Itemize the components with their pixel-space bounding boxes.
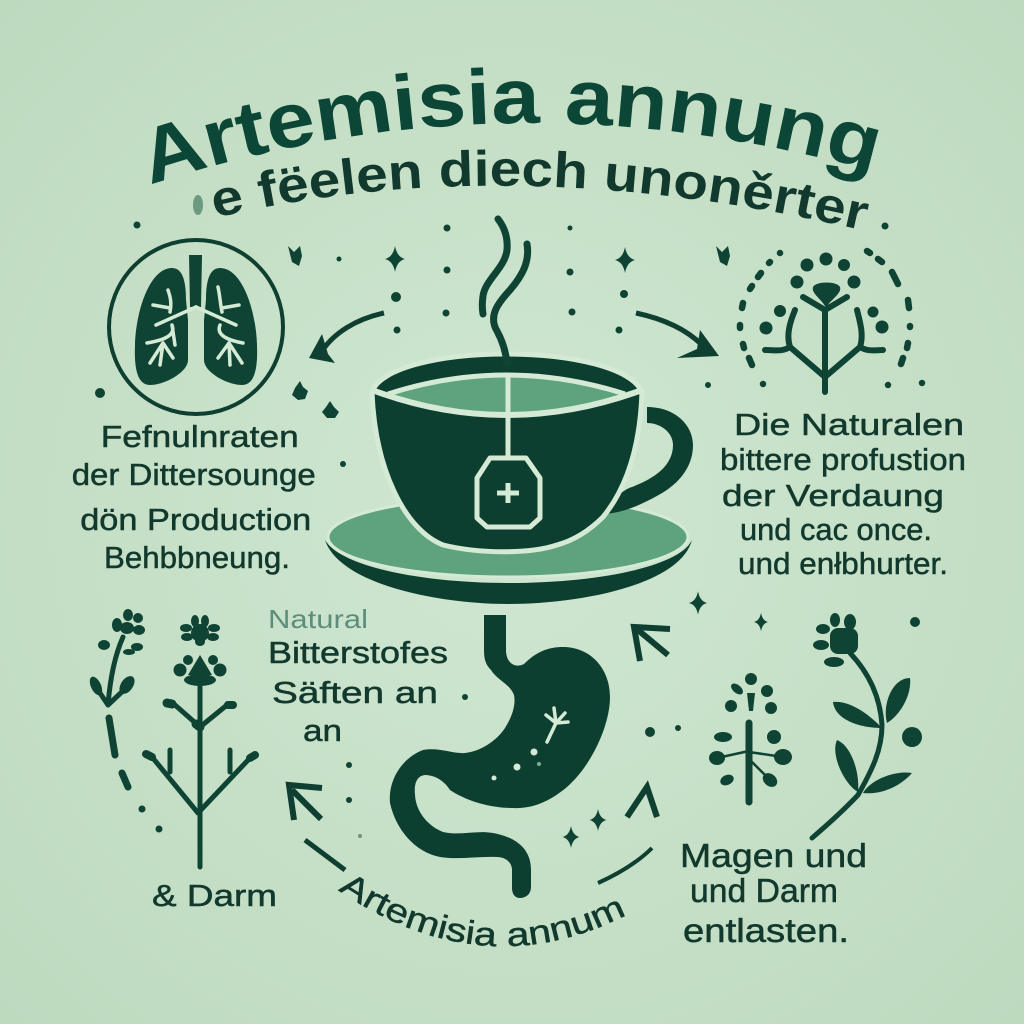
text block: centre left: Säften an: [272, 675, 438, 710]
text block: right top: bittere profustion: [720, 442, 966, 477]
text block: bottom right: und Darm: [690, 872, 838, 909]
tag: [477, 458, 540, 527]
text block: & Darm: & Darm: [152, 878, 277, 913]
text block: centre left: Natural: [268, 604, 368, 634]
icon: stomach: [390, 615, 610, 898]
text block: bottom right: Magen und: [680, 837, 867, 874]
title: Artemisia annung: [152, 67, 878, 184]
icon: left tall flower: [146, 615, 255, 867]
text block: left top: Fefnulnraten: [101, 419, 299, 454]
icon: plant in dashed circle: [740, 251, 922, 392]
icon: steam: [482, 219, 528, 364]
text block: right top: und cac once.: [740, 512, 932, 547]
text block: right top: Die Naturalen: [734, 407, 964, 442]
text block: left top: der Dittersounge: [72, 457, 316, 492]
text block: right top: der Verdaung: [722, 478, 944, 513]
subtitle: e fëelen diech unoněrter: [214, 150, 869, 228]
text block: left top: dön Production: [80, 502, 311, 537]
curved label: Artemisia annum: Artemisia annum: [338, 876, 625, 947]
icon: tea cup with bag on saucer: [325, 354, 693, 604]
saucer: [328, 497, 688, 577]
icon: small centre-right plant: [709, 673, 792, 802]
arrow: cup to plant: [636, 313, 719, 358]
icon: right large sprig with flower: [812, 613, 922, 838]
arrow: lower left: [289, 785, 345, 870]
text block: bottom right: entlasten.: [683, 912, 849, 949]
arrow: cup to lungs: [309, 313, 384, 363]
text block: right top: und enłbhurter.: [738, 546, 948, 581]
text block: centre left: an: [303, 713, 342, 748]
text block: left top: Behbbneung.: [104, 540, 290, 575]
arrow: upper right of stomach: [634, 627, 670, 661]
text block: centre left: Bitterstofes: [268, 635, 448, 670]
bowl: [372, 354, 642, 552]
icon: left sprig: [87, 609, 159, 829]
icon: lungs in circle: [109, 240, 283, 414]
decorative sparkles and dots: [95, 195, 920, 848]
tea surface: [388, 375, 625, 415]
arrow: lower right: [598, 787, 657, 883]
string: [506, 376, 510, 458]
handle: [606, 407, 693, 514]
